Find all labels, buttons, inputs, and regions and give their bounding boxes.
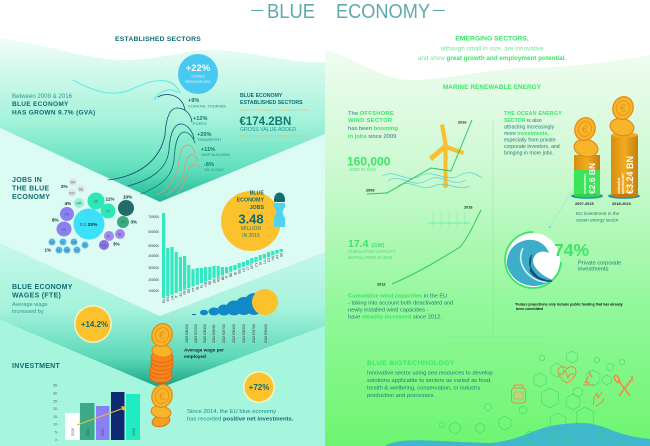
text block: net investments <box>187 409 294 422</box>
chart: investment columns: estimated <box>617 178 621 194</box>
bar chart: investment: 15 - <box>53 415 59 419</box>
chart: average wage: 2012 €29700 <box>222 324 226 343</box>
chart: investment columns: ocean energy sector <box>576 218 619 222</box>
labels: sector growth: COASTAL TOURISM <box>188 104 226 108</box>
bar chart: jobs per country: SE <box>208 281 212 285</box>
bar chart: investment: 10 - <box>53 422 59 426</box>
stat: private investments wave: investments <box>578 266 609 272</box>
labels: sector growth: SHIP BUILDING <box>201 152 230 157</box>
bubble chart: jobs by country: 2% <box>61 184 68 189</box>
bar chart: investment <box>53 384 140 442</box>
callout: blue economy jobs: BLUE <box>250 190 264 196</box>
bar chart: jobs per country: 300000 <box>148 266 159 270</box>
bubble chart: jobs by country: LT <box>61 240 66 244</box>
title: ECONOMY <box>336 1 430 23</box>
stat: capacity: 17.4 (GW) <box>348 238 385 250</box>
callout: living resources <box>178 54 218 94</box>
connector dots <box>549 190 573 228</box>
callout: blue economy jobs: JOBS <box>250 205 264 211</box>
text block: blue biotechnology <box>367 360 493 399</box>
text block: cumulative capacities: newly installed wind capacities - <box>348 308 429 314</box>
bubble chart: jobs by country: BG <box>101 244 107 248</box>
bar chart: jobs per country: 200000 <box>148 278 159 282</box>
bar chart: jobs per country: 100000 <box>148 289 159 293</box>
chart: investment columns: €3.24 BN <box>625 156 635 194</box>
callout: investment growth: +72% <box>249 383 269 392</box>
text block: GVA total: ESTABLISHED SECTORS <box>240 100 303 106</box>
bar chart: jobs per country: EU <box>162 298 166 303</box>
bar chart: jobs per country: CY <box>254 262 258 267</box>
bar chart: jobs per country: EE <box>238 269 242 274</box>
bubble chart: jobs by country: RO <box>69 192 75 196</box>
text block: GVA growth <box>12 93 96 116</box>
stat: capacity <box>348 238 396 260</box>
chart: average wage: 2015 €31700 <box>252 324 256 343</box>
icon: worker <box>274 192 285 227</box>
bar chart: investment: 25 - <box>53 400 59 404</box>
bubble chart: jobs by country: 3% <box>113 242 120 246</box>
bar chart: investment: 2012 <box>101 428 105 436</box>
bar chart: jobs per country: 700000 <box>148 215 159 219</box>
heading: jobs: JOBS IN <box>12 177 42 184</box>
callout: blue economy jobs: MILLION <box>241 226 261 232</box>
bubble chart: jobs by country: 10% <box>123 194 132 200</box>
line chart: wind capacity: 2012 <box>377 282 385 286</box>
stat: capacity: CUMULATIVE CAPACITY <box>348 249 396 254</box>
footnote: *Future projections only include public funding that has already <box>515 302 623 306</box>
text block: blue biotechnology: production and processes. <box>367 393 435 399</box>
bar chart: jobs per country: HR <box>204 281 208 287</box>
heading: marine renewable energy: MARINE RENEWABLE ENERGY <box>443 84 542 91</box>
line chart: offshore wind jobs <box>366 120 472 194</box>
bar chart: jobs per country: 600000 <box>148 230 159 234</box>
bubble chart: jobs by country: IT <box>106 210 110 214</box>
chart: investment columns: EU investment in the <box>576 211 620 216</box>
text block: GVA total: €174.2BN <box>240 116 291 128</box>
line chart: wind capacity: 2016 <box>464 206 472 210</box>
icon: coin stack upper: € <box>159 330 165 342</box>
bar chart: jobs per country: LU <box>263 259 267 264</box>
bar chart: jobs per country: CZ <box>267 258 271 262</box>
stat: capacity: INSTALLATION IN 2016 <box>348 255 393 260</box>
text block: offshore wind: WIND SECTOR <box>348 118 393 124</box>
heading: jobs: ECONOMY <box>12 194 50 201</box>
chart: average wage <box>184 289 278 359</box>
stat: 160,000 jobs: JOBS IN 2016 <box>349 167 376 172</box>
footnote <box>515 302 623 311</box>
bar chart: jobs per country: MT <box>250 264 254 269</box>
bar chart: jobs per country: IE <box>233 272 237 275</box>
text block: ocean energy: corporate investors, and <box>504 144 560 150</box>
text block: wages: Average wage <box>12 302 48 308</box>
heading: emerging sectors <box>418 36 566 62</box>
chart: investment columns: investments* <box>621 172 625 194</box>
labels: sector growth: +12% <box>193 116 207 122</box>
bar chart: jobs per country: 400000 <box>148 254 159 258</box>
bar chart: jobs per country: LT <box>246 267 250 270</box>
bar chart: jobs per country: PL <box>200 284 204 288</box>
bar chart: jobs per country <box>148 213 284 303</box>
line chart: wind capacity <box>377 206 481 286</box>
text block: GVA total: GROSS VALUE ADDED <box>240 127 296 133</box>
bar chart: investment: 0 - <box>55 438 59 442</box>
chart: average wage: 2013 €30100 <box>232 324 236 343</box>
chart: average wage: 2009 €27200 <box>194 324 198 343</box>
text block: cumulative capacities: have steadily increased since 2012. <box>348 314 442 320</box>
bar chart: jobs per country: SK <box>280 252 284 257</box>
heading: jobs: THE BLUE <box>12 186 49 192</box>
bubble chart: jobs by country: LV <box>50 240 55 244</box>
text block: offshore wind: The OFFSHORE <box>348 111 394 117</box>
labels: sector growth: -6% <box>204 162 214 168</box>
chart: average wage: Average wage per <box>184 348 224 352</box>
bubble chart: jobs by country: SE <box>79 188 84 192</box>
text block: GVA growth: Between 2009 & 2016 <box>12 93 73 100</box>
bubble chart: jobs by country <box>44 178 137 254</box>
text block: offshore wind <box>348 111 398 140</box>
stat: private investments wave <box>505 232 621 288</box>
bubble chart: jobs by country: PL <box>107 234 111 238</box>
text block: cumulative capacities <box>348 294 453 320</box>
heading: emerging sectors: EMERGING SECTORS, <box>455 36 529 42</box>
chart: investment columns: investments <box>583 174 587 194</box>
text block: cumulative capacities: - taking into account both deactivated and <box>348 300 453 306</box>
bubble chart: jobs by country: FR <box>65 212 70 216</box>
bar chart: investment: 5 - <box>55 430 59 434</box>
title: BLUE <box>267 1 315 23</box>
icon: cutlery <box>613 375 632 396</box>
icon: sea waves <box>383 173 482 188</box>
text block: GVA growth: HAS GROWN 9.7% (GVA) <box>12 110 96 116</box>
stat: private investments wave: 74% <box>554 240 589 260</box>
icon: small turbines <box>428 212 470 230</box>
labels: sector growth: +11% <box>201 147 215 153</box>
text block: ocean energy <box>504 111 562 156</box>
footnote: been committed <box>516 307 543 311</box>
text block: ocean energy: especially from private <box>504 138 556 144</box>
bar chart: jobs per country: 500000 <box>148 244 159 248</box>
bar chart: jobs per country: HU <box>271 255 275 260</box>
bubble chart: jobs by country: DE <box>62 228 67 232</box>
bar chart: investment: 30 - <box>53 392 59 396</box>
bar chart: jobs per country: FI <box>225 275 229 278</box>
callout: investment growth <box>243 371 275 403</box>
icon: hand <box>593 392 604 406</box>
chart: average wage: 2016 €33400 <box>264 324 268 343</box>
bubble chart: jobs by country: PT <box>121 220 126 224</box>
bar chart: investment: 35 - <box>53 384 59 388</box>
labels: sector growth: TRANSPORT <box>197 137 222 142</box>
bar chart: jobs per country: UK <box>170 294 174 300</box>
labels: sector growth: +9% <box>188 98 199 104</box>
callout: blue economy jobs <box>221 190 281 251</box>
heading: jobs <box>12 177 50 201</box>
chart: average wage: 2008 €26400 <box>185 324 189 343</box>
bar chart: jobs per country: BG <box>221 275 225 280</box>
bubble chart: jobs by country: 3% <box>130 220 137 224</box>
chart: investment columns: € <box>620 103 626 115</box>
stat: private investments wave: Private corporate <box>578 260 621 266</box>
icon: wind turbine <box>429 124 464 188</box>
text block: GVA growth: BLUE ECONOMY <box>12 101 69 108</box>
divider <box>445 120 545 337</box>
text block: wages: increased by <box>12 309 44 315</box>
callout: living resources: LIVING <box>191 74 205 78</box>
icon: coin stack upper <box>149 321 175 382</box>
text block: blue biotechnology: BLUE BIOTECHNOLOGY <box>367 360 455 367</box>
chart: average wage: 2014 €30900 <box>242 324 246 343</box>
bar chart: investment: 2009 <box>71 428 75 436</box>
text block: ocean energy: SECTOR is also <box>504 118 542 124</box>
chart: investment columns <box>571 94 640 222</box>
bubble chart: jobs by country: ER <box>72 240 77 244</box>
labels: sector growth <box>188 98 230 172</box>
text block: blue biotechnology: solutions applicable to sectors as varied as food, <box>367 378 492 384</box>
bar chart: jobs per country: BE <box>229 273 233 277</box>
bar chart: jobs per country: NL <box>196 286 200 290</box>
callout: living resources: +22% <box>186 63 211 74</box>
bubble chart: jobs by country: HR <box>76 202 82 206</box>
text block: blue biotechnology: health & wellbeing, conservation, or industry <box>367 386 481 392</box>
text block: ocean energy: more investments, <box>504 131 550 137</box>
bubble chart: jobs by country: FL <box>57 248 61 252</box>
bar chart: jobs per country: DK <box>212 278 216 283</box>
text block: GVA total: BLUE ECONOMY <box>240 93 283 99</box>
icon: coin stack lower <box>149 382 175 429</box>
bar chart: jobs per country: ES <box>166 297 170 301</box>
decoration: hexagon network <box>439 351 625 434</box>
labels: sector growth: PORTS <box>193 121 207 126</box>
heading: emerging sectors: and show great growth and employment potential. <box>418 55 566 62</box>
heading: established sectors: ESTABLISHED SECTORS <box>115 36 201 43</box>
text block: net investments: has recorded positive net investments. <box>187 416 294 422</box>
bubble chart: jobs by country: NL <box>118 232 122 236</box>
chart: investment columns: 2018-2019 <box>612 201 631 206</box>
icon: heart <box>558 367 576 383</box>
bar chart: jobs per country: RO <box>217 276 221 282</box>
text block: blue biotechnology: Innovative sector using sea resources to develop <box>367 370 493 376</box>
callout: blue economy jobs: IN 2016 <box>242 233 260 239</box>
labels: sector growth: OIL & GAS <box>204 167 224 172</box>
callout: blue economy jobs: 3.48 <box>238 212 264 226</box>
text block: wages <box>12 284 73 315</box>
text block: offshore wind: has been booming <box>348 126 398 132</box>
bar chart: jobs per country: AT <box>275 255 279 259</box>
text block: GVA total <box>240 93 308 136</box>
callout: wage growth <box>74 305 112 343</box>
text block: ocean energy: bringing in more jobs. <box>504 150 554 156</box>
bar chart: investment: 2014 <box>132 428 136 436</box>
bar chart: jobs per country: PT <box>191 287 195 292</box>
icon: coin stack lower: € <box>159 391 165 403</box>
bubble chart: jobs by country: EE <box>65 248 70 252</box>
heading: emerging sectors: although small in size, are innovative <box>441 46 544 52</box>
decoration: hexagons over wave <box>525 428 609 444</box>
bubble chart: jobs by country: 4% <box>64 201 71 206</box>
bar chart: jobs per country: DE <box>187 289 191 293</box>
bubble chart: jobs by country: IE <box>83 244 87 248</box>
chart: investment columns: € <box>582 124 588 136</box>
text block: wages: BLUE ECONOMY <box>12 284 73 291</box>
callout: wage growth: +14.2% <box>81 320 108 329</box>
text block: net investments: Since 2014, the EU blue economy <box>187 409 276 415</box>
bubble chart: jobs by country: DK <box>70 180 76 184</box>
bubble chart: jobs by country: 1% <box>44 248 51 252</box>
icon: microscope <box>583 371 594 385</box>
bar chart: investment: 20 - <box>53 407 59 411</box>
text block: cumulative capacities: Cumulative wind capacities in the EU <box>348 294 447 300</box>
bubble chart: jobs by country: ES 20% <box>80 222 98 228</box>
text block: ocean energy: attracting increasingly <box>504 124 555 130</box>
labels: sector growth: +20% <box>197 132 211 138</box>
chart: average wage: employed <box>184 354 206 359</box>
wave chart: sector growth <box>73 80 200 195</box>
chart: investment columns: 2007-2015 <box>575 201 594 206</box>
chart: average wage: 2011 €28900 <box>212 324 216 343</box>
bubble chart: jobs by country: UK <box>94 200 99 204</box>
chart: investment columns: €2.6 BN <box>587 163 597 194</box>
bar chart: jobs per country: LV <box>242 267 246 272</box>
bar chart: jobs per country: SI <box>259 262 263 265</box>
bubble chart: jobs by country: 11% <box>106 196 114 202</box>
callout: living resources: RESOURCES <box>185 79 211 84</box>
stat: 160,000 jobs: 160,000 <box>347 154 391 168</box>
bar chart: jobs per country: IT <box>175 295 179 298</box>
line chart: offshore wind jobs: 2016 <box>458 120 466 124</box>
text block: offshore wind: in jobs since 2009 <box>348 134 396 140</box>
icon: jar <box>512 385 526 403</box>
bubble chart: jobs by country: CY <box>74 248 80 252</box>
heading: investment: INVESTMENT <box>12 363 61 370</box>
bubble chart: jobs by country: SP <box>124 206 129 210</box>
chart: average wage: 2010 €28100 <box>203 324 207 343</box>
bar chart: jobs per country: EL <box>179 292 183 296</box>
line chart: offshore wind jobs: 2009 <box>366 188 374 192</box>
bar chart: jobs per country: FR <box>183 290 187 295</box>
text block: ocean energy: THE OCEAN ENERGY <box>504 111 562 117</box>
bar chart: investment: 2010 <box>86 428 90 436</box>
text block: wages: WAGES (FTE) <box>12 292 61 300</box>
title <box>251 1 445 23</box>
callout: blue economy jobs: ECONOMY <box>237 198 264 204</box>
bottom wave <box>385 423 650 446</box>
bubble chart: jobs by country: 8% <box>52 218 59 222</box>
